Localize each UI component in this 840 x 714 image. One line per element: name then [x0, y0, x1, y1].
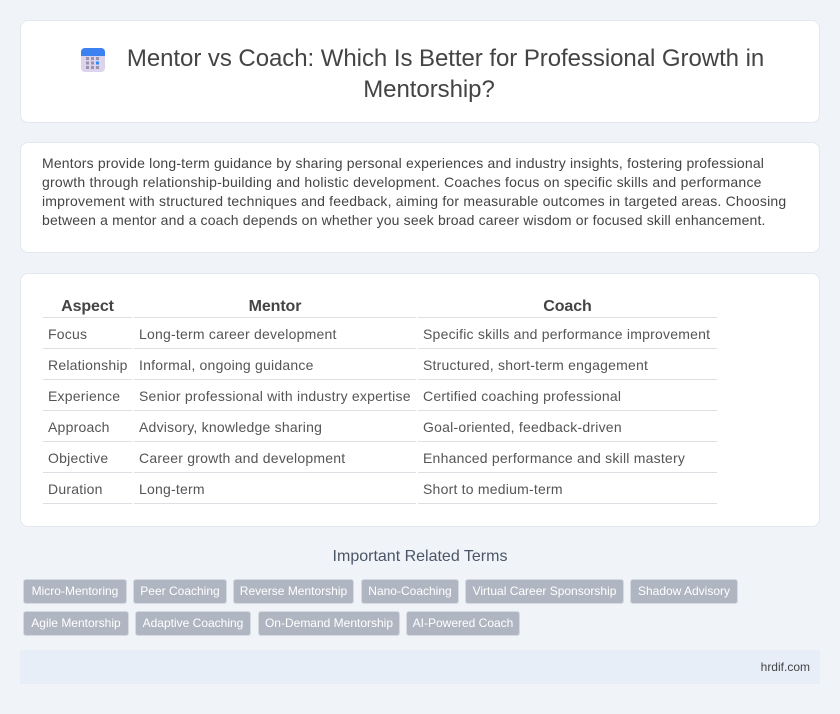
comparison table: Focus	[48, 326, 87, 342]
related term tags	[23, 579, 738, 636]
comparison table: Long-term career development	[139, 326, 337, 342]
comparison table	[43, 298, 717, 504]
comparison table: Experience	[48, 388, 120, 404]
comparison table: Long-term	[139, 481, 205, 497]
footer: source: hrdif.com	[761, 660, 810, 674]
comparison table: Relationship	[48, 357, 128, 373]
related term tags: Reverse Mentorship	[240, 584, 347, 598]
comparison table: Approach	[48, 419, 110, 435]
comparison table: Structured, short-term engagement	[423, 357, 648, 373]
summary text: Mentors provide long-term guidance by sharing personal experiences and industry insights, fostering professional	[42, 155, 764, 171]
comparison table: Senior professional with industry expertise	[139, 388, 411, 404]
comparison table: Short to medium-term	[423, 481, 563, 497]
related term tags: Virtual Career Sponsorship	[473, 584, 616, 598]
column headers: Mentor	[249, 298, 301, 315]
heading: related terms: Important Related Terms	[333, 548, 507, 565]
comparison table: Advisory, knowledge sharing	[139, 419, 322, 435]
related term tags: Agile Mentorship	[31, 616, 121, 630]
comparison table: Certified coaching professional	[423, 388, 621, 404]
comparison table: Specific skills and performance improvement	[423, 326, 710, 342]
comparison table: Career growth and development	[139, 450, 345, 466]
comparison table: Enhanced performance and skill mastery	[423, 450, 685, 466]
related term tags: Nano-Coaching	[368, 584, 452, 598]
footer	[20, 650, 820, 684]
related term tags: Peer Coaching	[140, 584, 220, 598]
related term tags: Shadow Advisory	[638, 584, 730, 598]
comparison table: Informal, ongoing guidance	[139, 357, 314, 373]
column headers: Aspect	[61, 298, 114, 315]
summary text: between a mentor and a coach depends on whether you seek broad career wisdom or focused skill enhancement.	[42, 212, 766, 228]
related term tags: Adaptive Coaching	[143, 616, 243, 630]
panel: summary	[20, 142, 820, 253]
related term tags: Micro-Mentoring	[32, 584, 118, 598]
summary text	[42, 155, 786, 228]
comparison table: Goal-oriented, feedback-driven	[423, 419, 622, 435]
icon: calendar	[81, 48, 105, 72]
title: Mentorship?	[363, 76, 495, 103]
title: Mentor vs Coach: Which Is Better for Professional Growth in	[127, 45, 764, 72]
summary text: growth through relationship-building and holistic development. Coaches focus on specific skills and performance	[42, 174, 762, 190]
panel: title header	[20, 20, 820, 123]
comparison table: Objective	[48, 450, 108, 466]
column headers	[61, 298, 592, 315]
related term tags: On-Demand Mentorship	[265, 616, 393, 630]
panel: comparison table	[20, 273, 820, 527]
column headers: Coach	[543, 298, 592, 315]
title	[127, 45, 764, 103]
related term tags: AI-Powered Coach	[413, 616, 513, 630]
comparison table: Duration	[48, 481, 103, 497]
summary text: improvement with structured techniques and feedback, aiming for measurable outcomes in targeted areas. Choosing	[42, 193, 786, 209]
